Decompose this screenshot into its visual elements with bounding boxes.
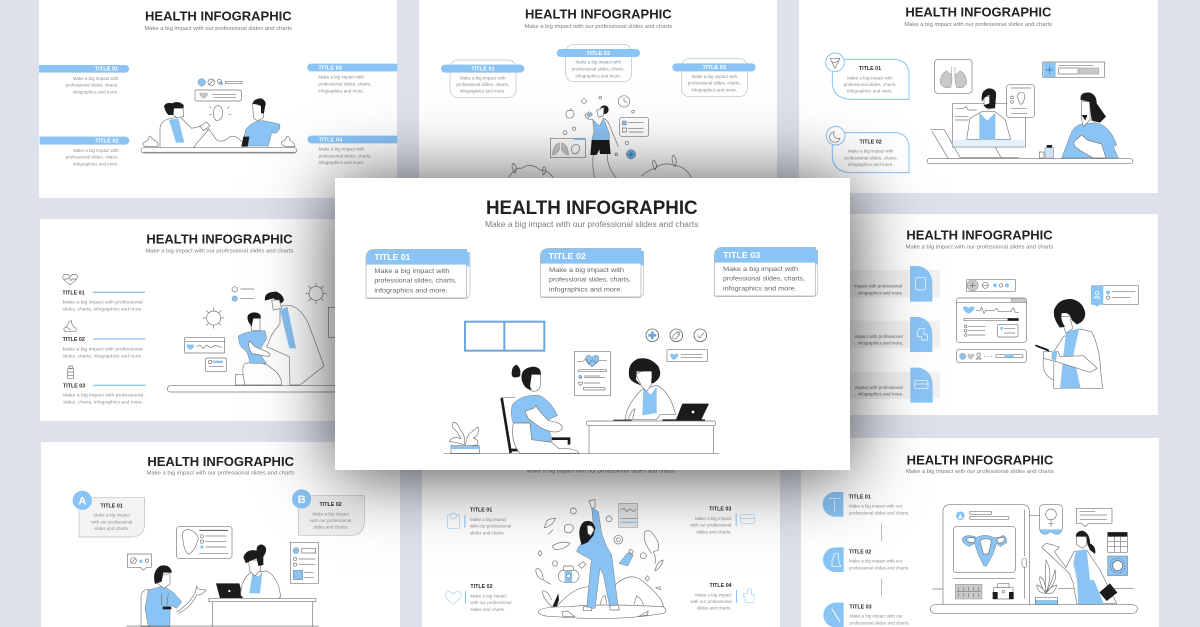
list item: title 02 <box>63 321 145 358</box>
subtitle: Make a big impact with our professional slides and charts <box>524 24 672 30</box>
card: title 01 <box>441 60 524 98</box>
list item: title 03: slides, charts, infographics and more. <box>63 400 143 405</box>
callout: title 04: professional slides, charts, <box>319 153 372 158</box>
list item: text 3: impact with professional <box>855 385 903 390</box>
figure: patient on chair <box>502 365 579 453</box>
shadow: center slide <box>335 178 850 470</box>
list item: title 01: Make a big impact with professional <box>63 300 143 305</box>
list item: title 04: TITLE 04 <box>709 583 732 589</box>
list item: title 03 <box>690 507 754 534</box>
callout: title 03: infographics and more. <box>318 88 364 93</box>
subtitle: Make a big impact with our professional slides and charts <box>147 471 295 477</box>
info card <box>667 350 707 362</box>
list item: title 02: Make a big impact with our <box>849 559 903 564</box>
title: HEALTH INFOGRAPHIC <box>525 6 672 21</box>
list item: title 03 <box>63 366 146 405</box>
callout: title 02: professional slides, charts, <box>66 155 119 160</box>
card: title 01 <box>826 53 909 99</box>
card: B title 02: Make a big impact <box>312 511 350 516</box>
title: HEALTH INFOGRAPHIC <box>905 5 1052 20</box>
list item: title 01: Make a big impact <box>470 517 507 522</box>
panel: center slide <box>335 178 850 470</box>
title: HEALTH INFOGRAPHIC <box>146 231 293 246</box>
illustration: health app dashboard <box>956 280 1138 388</box>
icon row <box>646 329 707 342</box>
list item: title 03: Make a big impact with our <box>849 614 903 619</box>
list item: text 2: impact with professional <box>855 334 903 339</box>
illustration: stretching woman <box>536 499 666 619</box>
list item: title 01: professional slides and charts. <box>849 510 909 515</box>
card: title 01: infographics and more. <box>847 89 893 94</box>
subtitle: Make a big impact with our professional slides and charts <box>527 469 675 475</box>
card: title 03 <box>714 247 818 297</box>
card: title 02: professional slides, charts, <box>572 67 625 72</box>
card: title 01: Make a big impact with <box>374 268 450 275</box>
panel: top-right slide <box>799 0 1158 193</box>
card: A title 01: A <box>78 495 86 507</box>
title: HEALTH INFOGRAPHIC <box>145 9 292 24</box>
card: title 02: professional slides, charts, <box>549 277 631 284</box>
list item: text 2 <box>850 317 940 352</box>
list item: title 04 <box>691 583 754 611</box>
panel: bottom-right slide <box>801 438 1159 627</box>
title: HEALTH INFOGRAPHIC <box>907 452 1054 467</box>
list item: title 02: professional slides and charts. <box>849 565 909 570</box>
callout: title 02: infographics and more. <box>73 162 119 167</box>
callout: title 04: TITLE 04 <box>319 137 343 143</box>
callout: title 03: Make a big impact with <box>318 75 364 80</box>
card: A title 01: with our professional <box>91 519 132 524</box>
list item: title 03: Make a big impact with professional <box>63 393 143 398</box>
subtitle: Make a big impact with our professional slides and charts <box>144 26 292 32</box>
card: title 01: TITLE 01 <box>859 66 881 72</box>
card: title 02: infographics and more. <box>848 162 893 167</box>
card: title 02: professional slides, charts, <box>844 155 897 160</box>
illustration: gynecology equipment <box>881 505 1137 613</box>
card: title 02 <box>540 248 644 298</box>
card: title 03: professional slides, charts, <box>723 276 805 283</box>
callout: title 03: TITLE 03 <box>318 65 342 71</box>
card: title 03: professional slides, charts, <box>688 81 741 86</box>
card: title 03 <box>672 59 756 97</box>
card: title 02 <box>826 126 909 173</box>
card: title 01 <box>366 249 470 299</box>
list item: text 1: , infographics and more. <box>855 290 903 295</box>
list item: title 02 <box>823 547 909 572</box>
panel: middle-left slide <box>40 219 340 421</box>
card: title 02: Make a big impact with <box>576 60 622 65</box>
callout: title 01 <box>39 65 129 95</box>
card: title 03: TITLE 03 <box>723 250 761 260</box>
title: HEALTH INFOGRAPHIC <box>486 198 698 219</box>
list item: title 04: Make a big impact <box>695 592 732 597</box>
callout: title 04: infographics and more. <box>319 160 364 165</box>
list item: title 02: slides and charts. <box>470 607 505 612</box>
card: title 02: Make a big impact with <box>549 267 624 274</box>
list item: text 1 <box>850 266 940 302</box>
callout: title 04 <box>307 136 397 165</box>
list item: title 04: with our professional <box>691 599 732 604</box>
list item: title 01 <box>823 492 909 517</box>
card: B title 02: slides and charts. <box>313 525 348 530</box>
panel: top-center slide <box>419 0 777 180</box>
panel: bottom-left slide <box>41 442 400 627</box>
list item: title 03 <box>823 603 910 627</box>
list item: title 01: slides, charts, infographics and more. <box>63 307 143 312</box>
card: title 01: professional slides, charts, <box>844 82 896 87</box>
list item: title 02: TITLE 02 <box>849 550 871 556</box>
list item: title 02: slides, charts, infographics and more. <box>63 353 143 358</box>
illustration: telehealth consultation <box>927 59 1133 164</box>
card: title 01: TITLE 01 <box>471 66 495 72</box>
list item: title 03: TITLE 03 <box>849 604 872 610</box>
card: A title 01: TITLE 01 <box>101 503 123 509</box>
list item: title 02: TITLE 02 <box>63 337 85 343</box>
card: title 03: Make a big impact with <box>692 74 738 79</box>
card: B title 02: TITLE 02 <box>320 502 342 508</box>
panel: top-left slide <box>39 0 397 198</box>
card: title 02: TITLE 02 <box>549 251 586 261</box>
list item: title 04: slides and charts. <box>697 606 732 611</box>
callout: title 02: Make a big impact with <box>73 148 119 153</box>
card: B title 02: with our professional <box>310 518 351 523</box>
card: title 03: Make a big impact with <box>723 266 798 273</box>
card: title 01: professional slides, charts, <box>456 82 509 87</box>
list item: title 03: professional slides and charts. <box>849 620 910 625</box>
list item: text 1: impact with professional <box>854 283 902 288</box>
list item: title 03: TITLE 03 <box>709 507 731 513</box>
illustration: doctor consultation <box>127 527 318 627</box>
plant <box>449 422 479 453</box>
title: HEALTH INFOGRAPHIC <box>906 227 1053 242</box>
callout: title 01: professional slides, charts, <box>65 83 118 88</box>
card: title 01: infographics and more. <box>374 288 448 295</box>
callout: title 03: professional slides, charts, <box>318 82 371 87</box>
card: A title 01: slides and charts. <box>94 526 129 531</box>
list item: title 02: Make a big impact with professional <box>63 346 143 351</box>
list item: title 01: slides and charts. <box>470 531 505 536</box>
medical report <box>574 352 611 395</box>
illustration: woman drinking water <box>508 96 692 178</box>
list item: text 2: , infographics and more. <box>855 341 903 346</box>
list item: title 03: with our professional <box>690 523 731 528</box>
subtitle: Make a big impact with our professional slides and charts <box>145 248 293 254</box>
illustration: blood pressure check <box>141 79 297 153</box>
card: title 01: Make a big impact with <box>847 75 893 80</box>
card: title 02: infographics and more. <box>576 73 621 78</box>
illustration: window <box>465 322 544 351</box>
panel: middle-right slide <box>845 214 1158 415</box>
list item: title 03: Make a big impact <box>695 516 732 521</box>
card: title 02: TITLE 02 <box>860 139 882 145</box>
list item: title 02 <box>445 584 511 612</box>
card: title 03: infographics and more. <box>723 286 797 293</box>
list item: title 02: TITLE 02 <box>470 584 493 590</box>
list item: title 03: slides and charts. <box>696 529 731 534</box>
card: title 03: infographics and more. <box>692 87 737 92</box>
subtitle: Make a big impact with our professional slides and charts <box>906 244 1053 250</box>
list item: title 01: TITLE 01 <box>62 291 85 297</box>
callout: title 03 <box>307 64 397 93</box>
subtitle: Make a big impact with our professional slides and charts <box>906 469 1054 475</box>
card: title 01: TITLE 01 <box>374 252 411 262</box>
list item: text 3: , infographics and more. <box>855 392 903 397</box>
card: title 02 <box>557 44 640 82</box>
list item: title 01: Make a big impact with our <box>849 504 903 509</box>
callout: title 01: Make a big impact with <box>73 76 119 81</box>
list item: title 02: Make a big impact <box>470 593 507 598</box>
list item: title 02: with our professional <box>470 600 511 605</box>
list item: title 01: TITLE 01 <box>470 508 492 514</box>
callout: title 02: TITLE 02 <box>95 139 119 145</box>
subtitle: Make a big impact with our professional slides and charts <box>904 22 1052 28</box>
card: B title 02 <box>292 489 364 535</box>
subtitle: Make a big impact with our professional slides and charts <box>485 219 698 229</box>
card: A title 01: Make a big impact <box>93 513 131 518</box>
illustration: vaccination <box>167 283 337 392</box>
card: title 01: Make a big impact with <box>460 75 506 80</box>
callout: title 02 <box>40 137 129 167</box>
callout: title 01: infographics and more. <box>73 90 118 95</box>
callout: title 04: Make a big impact with <box>319 147 365 152</box>
figure: doctor <box>444 358 718 454</box>
card: A title 01 <box>72 490 145 537</box>
card: title 01: infographics and more. <box>460 89 505 94</box>
card: title 03: TITLE 03 <box>703 65 726 71</box>
list item: title 01: TITLE 01 <box>849 494 871 500</box>
title: HEALTH INFOGRAPHIC <box>147 454 294 469</box>
card: B title 02: B <box>298 494 306 506</box>
card: title 01: professional slides, charts, <box>374 278 457 285</box>
list item: title 01: with our professional <box>470 524 511 529</box>
card: title 02: TITLE 02 <box>587 51 610 57</box>
list item: text 3 <box>850 368 940 403</box>
list item: title 01 <box>447 508 511 536</box>
list item: title 01 <box>62 274 145 312</box>
panel: bottom-center slide <box>422 460 780 627</box>
list item: title 03: TITLE 03 <box>63 384 85 390</box>
card: title 02: Make a big impact with <box>848 149 894 154</box>
callout: title 01: TITLE 01 <box>95 67 118 73</box>
card: title 02: infographics and more. <box>549 287 622 294</box>
